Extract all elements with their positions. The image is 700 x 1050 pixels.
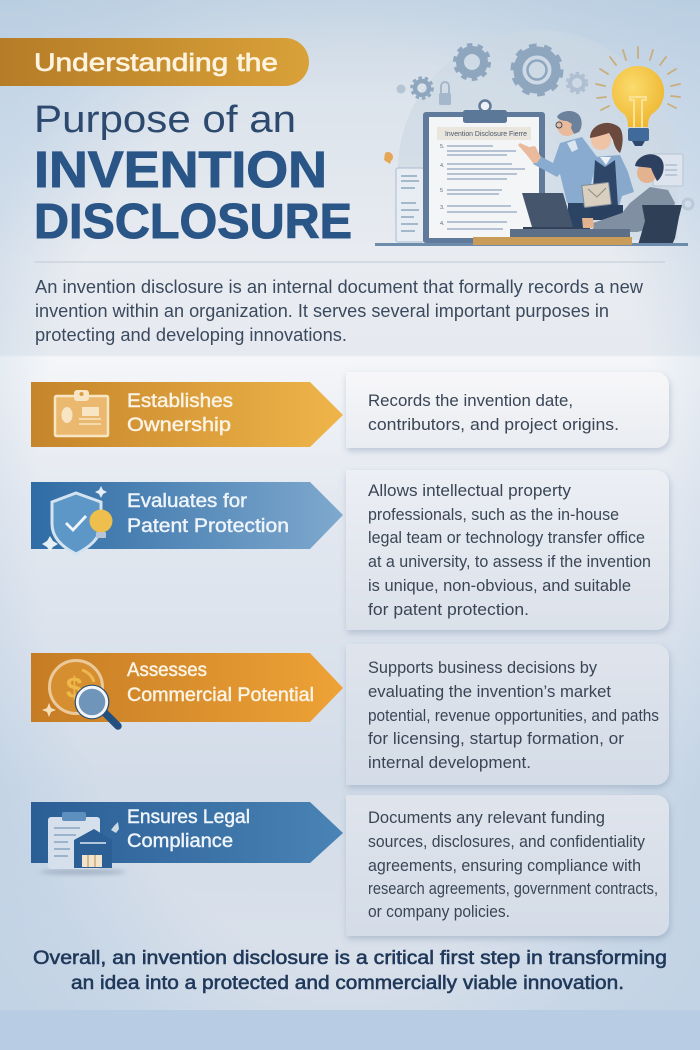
arrow banner: Assesses Commercial Potential <box>31 653 343 722</box>
heading pill: Understanding the <box>0 38 309 86</box>
intro paragraph: invention within an organization. It serves several important purposes in <box>35 301 609 321</box>
heading: Purpose of an: Purpose of an <box>34 99 296 141</box>
intro paragraph: An invention disclosure is an internal document that formally records a new <box>35 277 644 297</box>
woman with tablet <box>582 123 634 220</box>
heading: INVENTION: INVENTION <box>34 141 327 198</box>
description card 3: internal development. <box>368 753 531 772</box>
arrow banner: Assesses Commercial Potential: Commercial Potential <box>127 685 314 706</box>
description card 4: Documents any relevant funding <box>368 808 605 827</box>
closing statement <box>33 948 667 994</box>
arrow banner: Ensures Legal Compliance <box>31 802 343 863</box>
description card 3: for licensing, startup formation, or <box>368 729 624 748</box>
description card 2: at a university, to assess if the invention <box>368 552 651 571</box>
divider above intro <box>35 262 665 263</box>
padlock <box>439 82 451 105</box>
description card 1: contributors, and project origins. <box>368 415 619 434</box>
description card 3: potential, revenue opportunities, and paths <box>368 706 659 725</box>
gears <box>396 45 693 209</box>
description card 3: Supports business decisions by <box>368 658 597 677</box>
description card 4: research agreements, government contracts, <box>368 879 658 898</box>
intro paragraph: protecting and developing innovations. <box>35 325 347 345</box>
clipboard with form <box>423 100 545 243</box>
description card 3: evaluating the invention’s market <box>368 682 611 701</box>
row 2: evaluates for patent protection <box>31 470 669 630</box>
description card 4: sources, disclosures, and confidentiality <box>368 832 645 851</box>
heading pill: Understanding the: Understanding the <box>34 49 278 77</box>
description card 2: Allows intellectual property <box>368 481 571 500</box>
arrow banner: Evaluates for Patent Protection <box>31 482 343 549</box>
closing statement: an idea into a protected and commercially viable innovation. <box>71 973 624 994</box>
icon: ID badge <box>55 390 108 436</box>
arrow banner: Assesses Commercial Potential: Assesses <box>127 660 207 681</box>
arrow banner: Establishes Ownership <box>31 382 343 447</box>
icon: clipboard and building <box>40 812 126 875</box>
description card 1 <box>346 372 669 448</box>
row 1: establishes ownership <box>31 372 669 448</box>
icon: coin with magnifying glass <box>42 660 118 726</box>
description card 2 <box>346 470 669 630</box>
clipboard with form: 5. <box>440 144 445 150</box>
standing man pointing <box>518 111 597 232</box>
description card 2: professionals, such as the in-house <box>368 505 619 524</box>
desk and floor <box>375 229 688 246</box>
arrow banner: Establishes Ownership: Establishes <box>127 391 233 412</box>
small background documents and key <box>384 152 683 242</box>
title block <box>0 38 352 249</box>
description card 2: is unique, non-obvious, and suitable <box>368 576 631 595</box>
arrow banner: Ensures Legal Compliance: Compliance <box>127 831 233 852</box>
row 3: assesses commercial potential <box>31 644 669 785</box>
arrow banner: Establishes Ownership: Ownership <box>127 415 231 436</box>
laptop <box>522 193 583 230</box>
clipboard with form: 5 <box>440 188 443 194</box>
description card 4: or company policies. <box>368 902 510 921</box>
description card 3 <box>346 644 669 785</box>
lightbulb with rays <box>596 47 680 146</box>
illustration: team reviewing invention disclosure form <box>375 30 693 246</box>
description card 1: Records the invention date, <box>368 391 573 410</box>
clipboard with form: 4. <box>440 163 445 169</box>
intro paragraph <box>35 277 644 345</box>
seated man <box>582 154 682 245</box>
heading: DISCLOSURE: DISCLOSURE <box>34 195 352 249</box>
clipboard with form: 3. <box>440 205 445 211</box>
arrow banner: Evaluates for Patent Protection: Patent Protection <box>127 516 289 537</box>
description card 2: for patent protection. <box>368 600 529 619</box>
description card 4: agreements, ensuring compliance with <box>368 856 641 875</box>
arrow banner: Ensures Legal Compliance: Ensures Legal <box>127 807 250 828</box>
clipboard with form: Invention Disclosure Fierre <box>445 129 527 138</box>
globe backdrop <box>398 30 678 240</box>
description card 4 <box>346 795 669 936</box>
description card 2: legal team or technology transfer office <box>368 528 645 547</box>
icon: shield with check and bulb <box>42 486 112 554</box>
closing statement: Overall, an invention disclosure is a critical first step in transforming <box>33 948 667 969</box>
icon: coin with magnifying glass: $ <box>66 672 83 705</box>
clipboard with form: 4. <box>440 221 445 227</box>
row 4: ensures legal compliance <box>31 795 669 936</box>
arrow banner: Evaluates for Patent Protection: Evaluates for <box>127 491 248 512</box>
